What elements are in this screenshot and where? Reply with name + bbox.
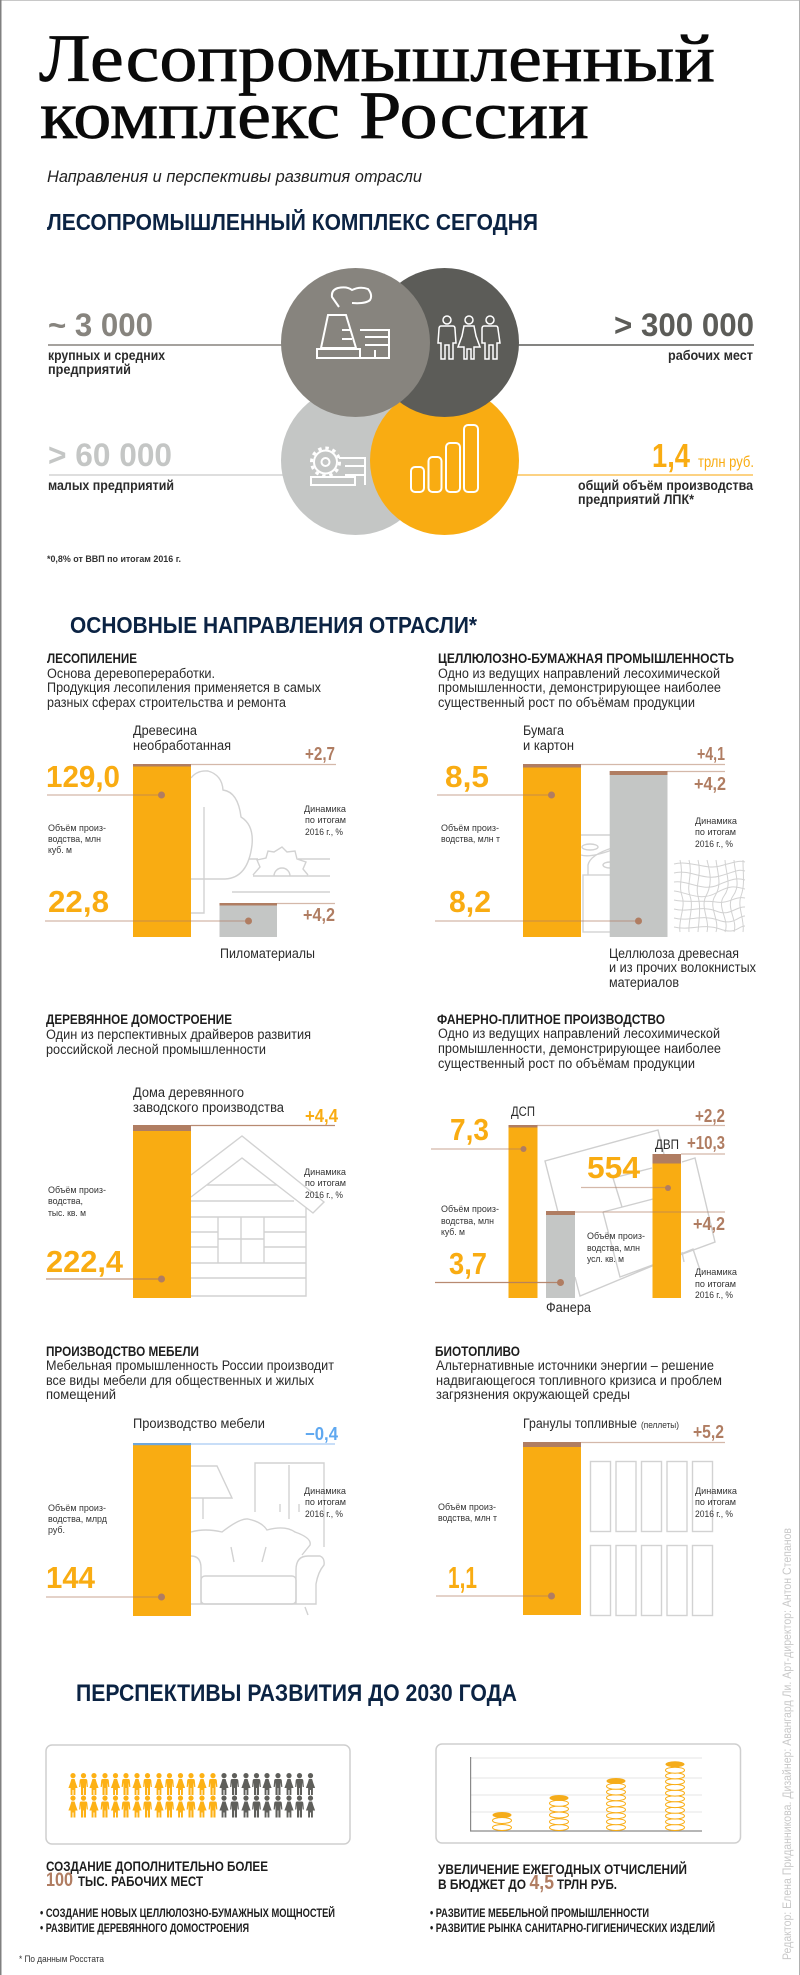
axis note: dynamics: по итогам bbox=[695, 1497, 736, 1508]
text block: российской лесной промышленности bbox=[46, 1042, 266, 1057]
bullet list bbox=[40, 1907, 335, 1935]
text block: Одно из ведущих направлений лесохимической bbox=[438, 666, 720, 681]
chart labels: и картон bbox=[523, 738, 574, 753]
axis note: dynamics: по итогам bbox=[305, 815, 346, 826]
subtitle: Направления и перспективы развития отрасли bbox=[47, 167, 423, 186]
values bbox=[445, 744, 726, 919]
caption: 100 thousand jobs: ТЫС. РАБОЧИХ МЕСТ bbox=[78, 1873, 203, 1889]
caption: 100 thousand jobs bbox=[46, 1858, 268, 1891]
bar chart bbox=[45, 764, 336, 937]
icon: house bbox=[191, 1136, 324, 1296]
axis note: dynamics: Динамика bbox=[695, 1486, 738, 1497]
axis note: dynamics: Динамика bbox=[304, 1167, 347, 1178]
values: −0,4 bbox=[305, 1424, 338, 1444]
text block bbox=[438, 651, 734, 710]
text block: Один из перспективных драйверов развития bbox=[46, 1027, 311, 1042]
chart labels: Бумага bbox=[523, 723, 564, 738]
icon: pellet grid bbox=[590, 1462, 712, 1616]
bar chart bbox=[436, 1442, 725, 1615]
axis note: volume: куб. м bbox=[48, 845, 72, 856]
panel: sawmilling bbox=[45, 651, 347, 961]
stat: total production: общий объём производства bbox=[578, 477, 753, 493]
heading: prospects to 2030: ПЕРСПЕКТИВЫ РАЗВИТИЯ ДО 2030 ГОДА bbox=[76, 1680, 517, 1707]
stat: workplaces bbox=[614, 307, 754, 363]
heading: complex today: ЛЕСОПРОМЫШЛЕННЫЙ КОМПЛЕКС СЕГОДНЯ bbox=[47, 208, 538, 235]
box with coin chart bbox=[436, 1744, 740, 1843]
axis note: dynamics: по итогам bbox=[695, 1279, 736, 1290]
values: 22,8 bbox=[48, 884, 109, 919]
text block: промышленности, демонстрирующее наиболее bbox=[438, 680, 721, 695]
axis note: volume, m2: водства, млн bbox=[587, 1243, 640, 1254]
chart labels: необработанная bbox=[133, 738, 231, 753]
panel: plywood and boards bbox=[431, 1012, 738, 1315]
chart labels bbox=[523, 723, 756, 990]
axis note: volume: водства, млрд bbox=[48, 1514, 107, 1525]
values: 3,7 bbox=[449, 1246, 487, 1281]
values: +4,2 bbox=[303, 905, 335, 925]
axis note: dynamics: 2016 г., % bbox=[695, 1290, 733, 1301]
axis note: dynamics bbox=[695, 816, 738, 850]
text block: Продукция лесопиления применяется в самых bbox=[47, 680, 321, 695]
axis note: volume: Объём произ- bbox=[438, 1502, 496, 1513]
values bbox=[448, 1422, 724, 1595]
footnote: GDP: *0,8% от ВВП по итогам 2016 г. bbox=[47, 554, 181, 565]
stat: total production: трлн руб. bbox=[698, 454, 754, 471]
axis note: dynamics: 2016 г., % bbox=[305, 1509, 343, 1520]
text block: ПРОИЗВОДСТВО МЕБЕЛИ bbox=[46, 1344, 199, 1359]
values: +4,4 bbox=[305, 1106, 338, 1126]
stat: workplaces: рабочих мест bbox=[668, 347, 753, 363]
text block bbox=[47, 651, 321, 710]
text block: ДЕРЕВЯННОЕ ДОМОСТРОЕНИЕ bbox=[46, 1012, 232, 1027]
title bbox=[39, 20, 715, 153]
icon: fibre mesh bbox=[674, 860, 745, 932]
stat: small enterprises: малых предприятий bbox=[48, 477, 174, 493]
title: Лесопромышленный bbox=[39, 20, 715, 96]
stat: total production: предприятий ЛПК* bbox=[578, 491, 694, 507]
chart label bbox=[133, 1085, 284, 1115]
text block: Альтернативные источники энергии – решение bbox=[436, 1358, 714, 1373]
values: 1,1 bbox=[448, 1560, 477, 1595]
values: 554 bbox=[587, 1150, 641, 1185]
axis note: volume: водства, млн bbox=[48, 834, 101, 845]
chart labels: Древесина bbox=[133, 723, 197, 738]
axis note: volume: Объём произ- bbox=[48, 1185, 106, 1196]
axis note: volume bbox=[48, 1185, 106, 1219]
axis note: volume, m3: куб. м bbox=[441, 1227, 465, 1238]
axis note: volume, m3 bbox=[441, 1204, 499, 1238]
axis note: volume, m3: водства, млн bbox=[441, 1216, 494, 1227]
bar chart bbox=[431, 1125, 725, 1298]
stat: large and medium enterprises: крупных и средних bbox=[48, 347, 165, 363]
title: комплекс России bbox=[40, 77, 589, 153]
box with people pictogram bbox=[46, 1745, 350, 1844]
chart labels bbox=[511, 1104, 679, 1315]
panel: four circles overview bbox=[48, 268, 754, 535]
text block: существенный рост по объёмам продукции bbox=[438, 1056, 695, 1071]
axis note: dynamics: Динамика bbox=[304, 1486, 347, 1497]
heading: main directions: ОСНОВНЫЕ НАПРАВЛЕНИЯ ОТРАСЛИ* bbox=[70, 612, 477, 638]
text block: ЛЕСОПИЛЕНИЕ bbox=[47, 651, 137, 666]
axis note: dynamics bbox=[695, 1267, 738, 1301]
values: +5,2 bbox=[693, 1422, 724, 1442]
values: +4,2 bbox=[694, 774, 726, 794]
text block bbox=[46, 1344, 334, 1402]
axis note: volume: водства, млн т bbox=[441, 834, 501, 845]
icon: tree and saw bbox=[191, 771, 330, 913]
axis note: volume: Объём произ- bbox=[441, 823, 499, 834]
caption: 100 thousand jobs: 100 bbox=[46, 1870, 73, 1891]
axis note: volume bbox=[48, 1503, 107, 1536]
stat: small enterprises: > 60 000 bbox=[48, 437, 172, 473]
bullet list: • РАЗВИТИЕ ДЕРЕВЯННОГО ДОМОСТРОЕНИЯ bbox=[40, 1923, 249, 1935]
text block: загрязнения окружающей среды bbox=[436, 1387, 630, 1402]
text block bbox=[435, 1344, 722, 1402]
icon: paper rolls bbox=[581, 835, 617, 932]
axis note: volume: Объём произ- bbox=[48, 1503, 106, 1514]
credits: Редактор: Елена Приданникова. Дизайнер: Авангард Ли. Арт-директор: Антон Степанов bbox=[782, 1528, 794, 1960]
axis note: dynamics: 2016 г., % bbox=[695, 1509, 733, 1520]
values: +4,1 bbox=[697, 744, 725, 764]
bullet list: • РАЗВИТИЕ РЫНКА САНИТАРНО-ГИГИЕНИЧЕСКИХ ИЗДЕЛИЙ bbox=[430, 1922, 715, 1935]
circle: small enterprises bbox=[281, 386, 430, 535]
values bbox=[46, 1106, 338, 1279]
caption: 4.5 trillion: 4,5 bbox=[530, 1872, 554, 1894]
axis note: volume, m3: Объём произ- bbox=[441, 1204, 499, 1215]
values: 222,4 bbox=[46, 1244, 124, 1279]
panel: furniture bbox=[46, 1344, 347, 1616]
chart labels: материалов bbox=[609, 975, 679, 990]
axis note: dynamics: Динамика bbox=[304, 804, 347, 815]
bar chart bbox=[46, 1443, 335, 1616]
chart labels: и из прочих волокнистых bbox=[609, 960, 756, 975]
values: 129,0 bbox=[46, 759, 120, 794]
footnote: source: * По данным Росстата bbox=[19, 1954, 105, 1965]
stat: total production: 1,4 bbox=[652, 437, 691, 474]
caption: 4.5 trillion: В БЮДЖЕТ ДО bbox=[438, 1876, 526, 1892]
chart label: заводского производства bbox=[133, 1100, 284, 1115]
text block bbox=[46, 1012, 311, 1057]
axis note: dynamics bbox=[304, 1486, 347, 1520]
axis note: volume: тыс. кв. м bbox=[48, 1208, 86, 1219]
text block: Одно из ведущих направлений лесохимической bbox=[438, 1026, 720, 1041]
chart labels bbox=[133, 723, 315, 961]
chart label: Гранулы топливные bbox=[523, 1416, 637, 1431]
bullet list bbox=[430, 1907, 715, 1935]
axis note: volume bbox=[438, 1502, 498, 1524]
axis note: volume: руб. bbox=[48, 1525, 65, 1536]
caption: 4.5 trillion: ТРЛН РУБ. bbox=[557, 1876, 617, 1892]
panel: biofuel bbox=[435, 1344, 738, 1616]
panel: pulp and paper bbox=[435, 651, 756, 990]
chart labels: Целлюлоза древесная bbox=[609, 946, 739, 961]
bar chart bbox=[46, 1125, 335, 1298]
values: 8,2 bbox=[449, 884, 491, 919]
text block: надвигающегося топливного кризиса и проблем bbox=[436, 1373, 722, 1388]
text block: помещений bbox=[46, 1387, 116, 1402]
icon: boards bbox=[545, 1130, 715, 1296]
axis note: volume: водства, млн т bbox=[438, 1513, 498, 1524]
text block: ЦЕЛЛЮЛОЗНО-БУМАЖНАЯ ПРОМЫШЛЕННОСТЬ bbox=[438, 651, 734, 666]
panel: wooden housing bbox=[46, 1012, 347, 1298]
text block: промышленности, демонстрирующее наиболее bbox=[438, 1041, 721, 1056]
panel: budget contributions bbox=[430, 1744, 740, 1935]
text block: разных сферах строительства и ремонта bbox=[47, 695, 286, 710]
stat: large and medium enterprises: предприятий bbox=[48, 361, 131, 377]
caption: 100 thousand jobs: СОЗДАНИЕ ДОПОЛНИТЕЛЬНО БОЛЕЕ bbox=[46, 1858, 268, 1874]
chart labels: Фанера bbox=[546, 1300, 591, 1315]
axis note: dynamics: по итогам bbox=[305, 1497, 346, 1508]
values: +10,3 bbox=[687, 1133, 725, 1153]
text block: ФАНЕРНО-ПЛИТНОЕ ПРОИЗВОДСТВО bbox=[437, 1012, 665, 1027]
bullet list: • РАЗВИТИЕ МЕБЕЛЬНОЙ ПРОМЫШЛЕННОСТИ bbox=[430, 1907, 649, 1920]
axis note: dynamics: Динамика bbox=[695, 816, 738, 827]
caption: 4.5 trillion: УВЕЛИЧЕНИЕ ЕЖЕГОДНЫХ ОТЧИСЛЕНИЙ bbox=[438, 1860, 687, 1877]
values: +2,7 bbox=[305, 744, 335, 764]
axis note: volume bbox=[48, 823, 106, 856]
stat lines bbox=[48, 345, 754, 475]
chart labels: Пиломатериалы bbox=[220, 946, 315, 961]
values bbox=[449, 1106, 725, 1281]
chart label: (пеллеты) bbox=[641, 1420, 679, 1431]
axis note: dynamics: Динамика bbox=[695, 1267, 738, 1278]
values: 7,3 bbox=[450, 1112, 489, 1147]
axis note: volume: водства, bbox=[48, 1196, 83, 1207]
values: +4,2 bbox=[693, 1214, 725, 1234]
axis note: dynamics: по итогам bbox=[305, 1178, 346, 1189]
values: 8,5 bbox=[445, 759, 489, 794]
axis note: dynamics bbox=[304, 804, 347, 838]
values bbox=[46, 744, 335, 925]
axis note: volume, m2: Объём произ- bbox=[587, 1231, 645, 1242]
text block: БИОТОПЛИВО bbox=[435, 1344, 520, 1359]
stat: large and medium enterprises bbox=[48, 307, 165, 377]
text block: Основа деревопереработки. bbox=[47, 666, 215, 681]
values: +2,2 bbox=[695, 1106, 725, 1126]
axis note: dynamics: по итогам bbox=[695, 827, 736, 838]
stat: total production bbox=[578, 437, 754, 507]
panel: new jobs bbox=[40, 1745, 350, 1935]
axis note: volume bbox=[441, 823, 501, 845]
circle: factories bbox=[281, 268, 430, 417]
axis note: dynamics: 2016 г., % bbox=[305, 827, 343, 838]
stat: large and medium enterprises: ~ 3 000 bbox=[48, 307, 153, 343]
text block: все виды мебели для общественных и жилых bbox=[46, 1373, 314, 1388]
bullet list: • СОЗДАНИЕ НОВЫХ ЦЕЛЛЮЛОЗНО-БУМАЖНЫХ МОЩНОСТЕЙ bbox=[40, 1907, 335, 1920]
axis note: dynamics: 2016 г., % bbox=[305, 1190, 343, 1201]
text block: Мебельная промышленность России производит bbox=[46, 1358, 334, 1373]
values: 144 bbox=[46, 1560, 96, 1595]
chart label: Производство мебели bbox=[133, 1416, 265, 1431]
bar chart bbox=[435, 764, 725, 937]
axis note: dynamics bbox=[304, 1167, 347, 1201]
axis note: dynamics bbox=[695, 1486, 738, 1520]
axis note: volume, m2 bbox=[587, 1231, 645, 1265]
circle: production volume bbox=[370, 386, 519, 535]
chart labels: ДВП bbox=[655, 1137, 679, 1152]
axis note: volume, m2: усл. кв. м bbox=[587, 1254, 624, 1265]
axis note: dynamics: 2016 г., % bbox=[695, 839, 733, 850]
caption: 4.5 trillion bbox=[438, 1860, 687, 1894]
stat: workplaces: > 300 000 bbox=[614, 307, 754, 343]
stat: small enterprises bbox=[48, 437, 174, 493]
values bbox=[46, 1424, 338, 1595]
text block: существенный рост по объёмам продукции bbox=[438, 695, 695, 710]
circle: workers bbox=[370, 268, 519, 417]
icon: sofa, lamp, wardrobe bbox=[191, 1463, 324, 1615]
chart labels: ДСП bbox=[511, 1104, 535, 1119]
text block bbox=[437, 1012, 721, 1071]
chart label: Дома деревянного bbox=[133, 1085, 244, 1100]
axis note: volume: Объём произ- bbox=[48, 823, 106, 834]
